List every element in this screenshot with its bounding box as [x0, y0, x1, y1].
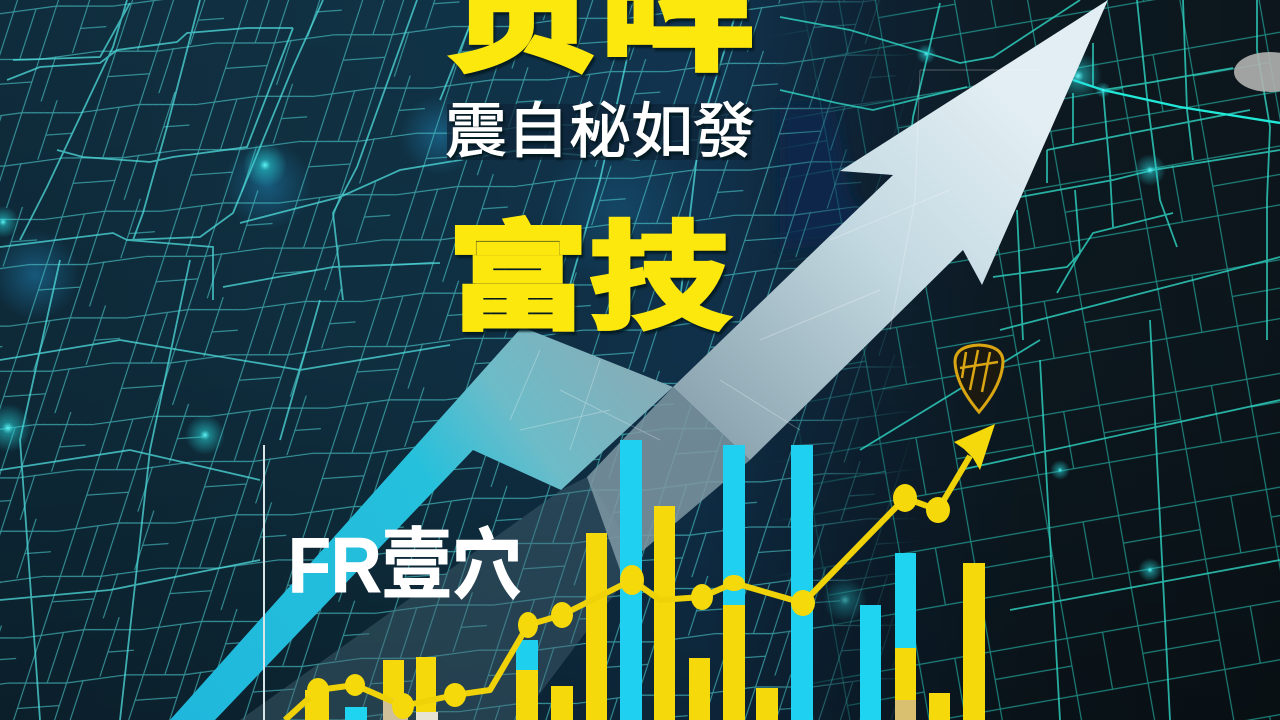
icon: gold location pin	[955, 345, 1003, 412]
faint lower band of large arrow	[240, 477, 640, 720]
bar chart	[305, 440, 985, 720]
glowing network nodes	[0, 44, 1166, 622]
yellow trend line with arrow	[285, 424, 995, 720]
thin vertical axis	[263, 445, 265, 720]
blurred corner mark	[1234, 52, 1280, 92]
chart label: FR壹穴	[288, 521, 522, 609]
title line two: 富技	[447, 213, 731, 345]
large rising arrow	[170, 0, 1108, 720]
subtitle: 震自秘如發	[445, 98, 755, 165]
